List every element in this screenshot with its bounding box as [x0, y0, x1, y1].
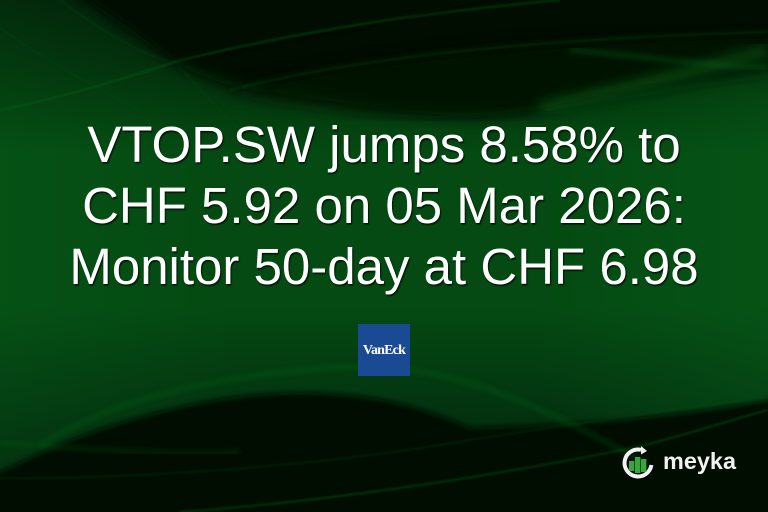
title: CHF 5.92 on 05 Mar 2026: — [82, 177, 686, 234]
meyka logo — [622, 446, 736, 478]
wordmark: meyka — [663, 448, 736, 474]
icon: meyka ring with bars — [625, 446, 651, 476]
title: VTOP.SW jumps 8.58% to — [87, 116, 681, 173]
icon: VanEck logo: VanEck — [363, 343, 405, 358]
top dark swoosh — [0, 0, 768, 115]
title — [69, 116, 699, 296]
top light lines — [0, 0, 560, 110]
icon: VanEck logo — [358, 324, 410, 376]
bottom dark hill — [0, 393, 768, 512]
title: Monitor 50-day at CHF 6.98 — [69, 238, 699, 295]
